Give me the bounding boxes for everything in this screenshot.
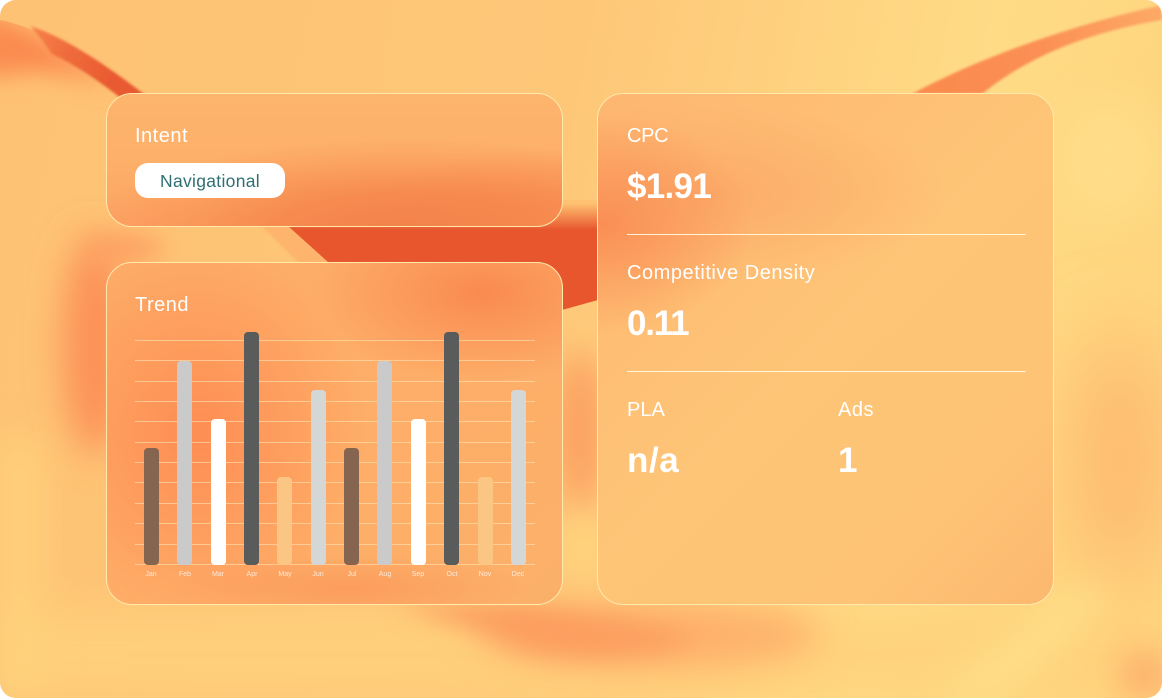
red band: center [288, 200, 598, 316]
label: CPC: CPC [627, 125, 668, 147]
value: PLA: n/a [627, 441, 679, 480]
heading: trend: Trend [135, 294, 189, 316]
bar chart: monthly trend: Apr [247, 571, 257, 578]
bar chart: monthly trend: Mar [212, 571, 224, 578]
bar chart: monthly trend: Sep [412, 571, 424, 578]
bar chart: monthly trend [135, 332, 535, 578]
bar chart: monthly trend: May [278, 571, 292, 578]
panel: metrics [597, 93, 1054, 605]
red band: top right [912, 5, 1162, 94]
bar chart: monthly trend: Aug [379, 571, 391, 578]
red band: top left [30, 26, 154, 102]
bar chart: monthly trend: Oct [447, 571, 457, 578]
bar chart: monthly trend: Nov [479, 571, 491, 578]
badge: navigational: Navigational [160, 171, 260, 191]
bar chart: monthly trend: Dec [512, 571, 524, 578]
bar chart: monthly trend: Feb [179, 571, 191, 578]
label: ads: Ads [838, 399, 874, 421]
badge: navigational [135, 163, 285, 198]
value: competitive density: 0.11 [627, 304, 688, 343]
value: ads: 1 [838, 441, 857, 480]
label: PLA: PLA [627, 399, 665, 421]
label: competitive density: Competitive Density [627, 262, 815, 284]
bar chart: monthly trend: Jun [312, 571, 324, 578]
panel: trend [106, 262, 563, 605]
light wedge under intent card [262, 226, 330, 264]
bar chart: monthly trend: Jul [348, 571, 356, 578]
heading: intent: Intent [135, 125, 188, 147]
bar chart: monthly trend: Jan [145, 571, 157, 578]
value: CPC: $1.91 [627, 167, 711, 206]
panel: intent [106, 93, 563, 227]
